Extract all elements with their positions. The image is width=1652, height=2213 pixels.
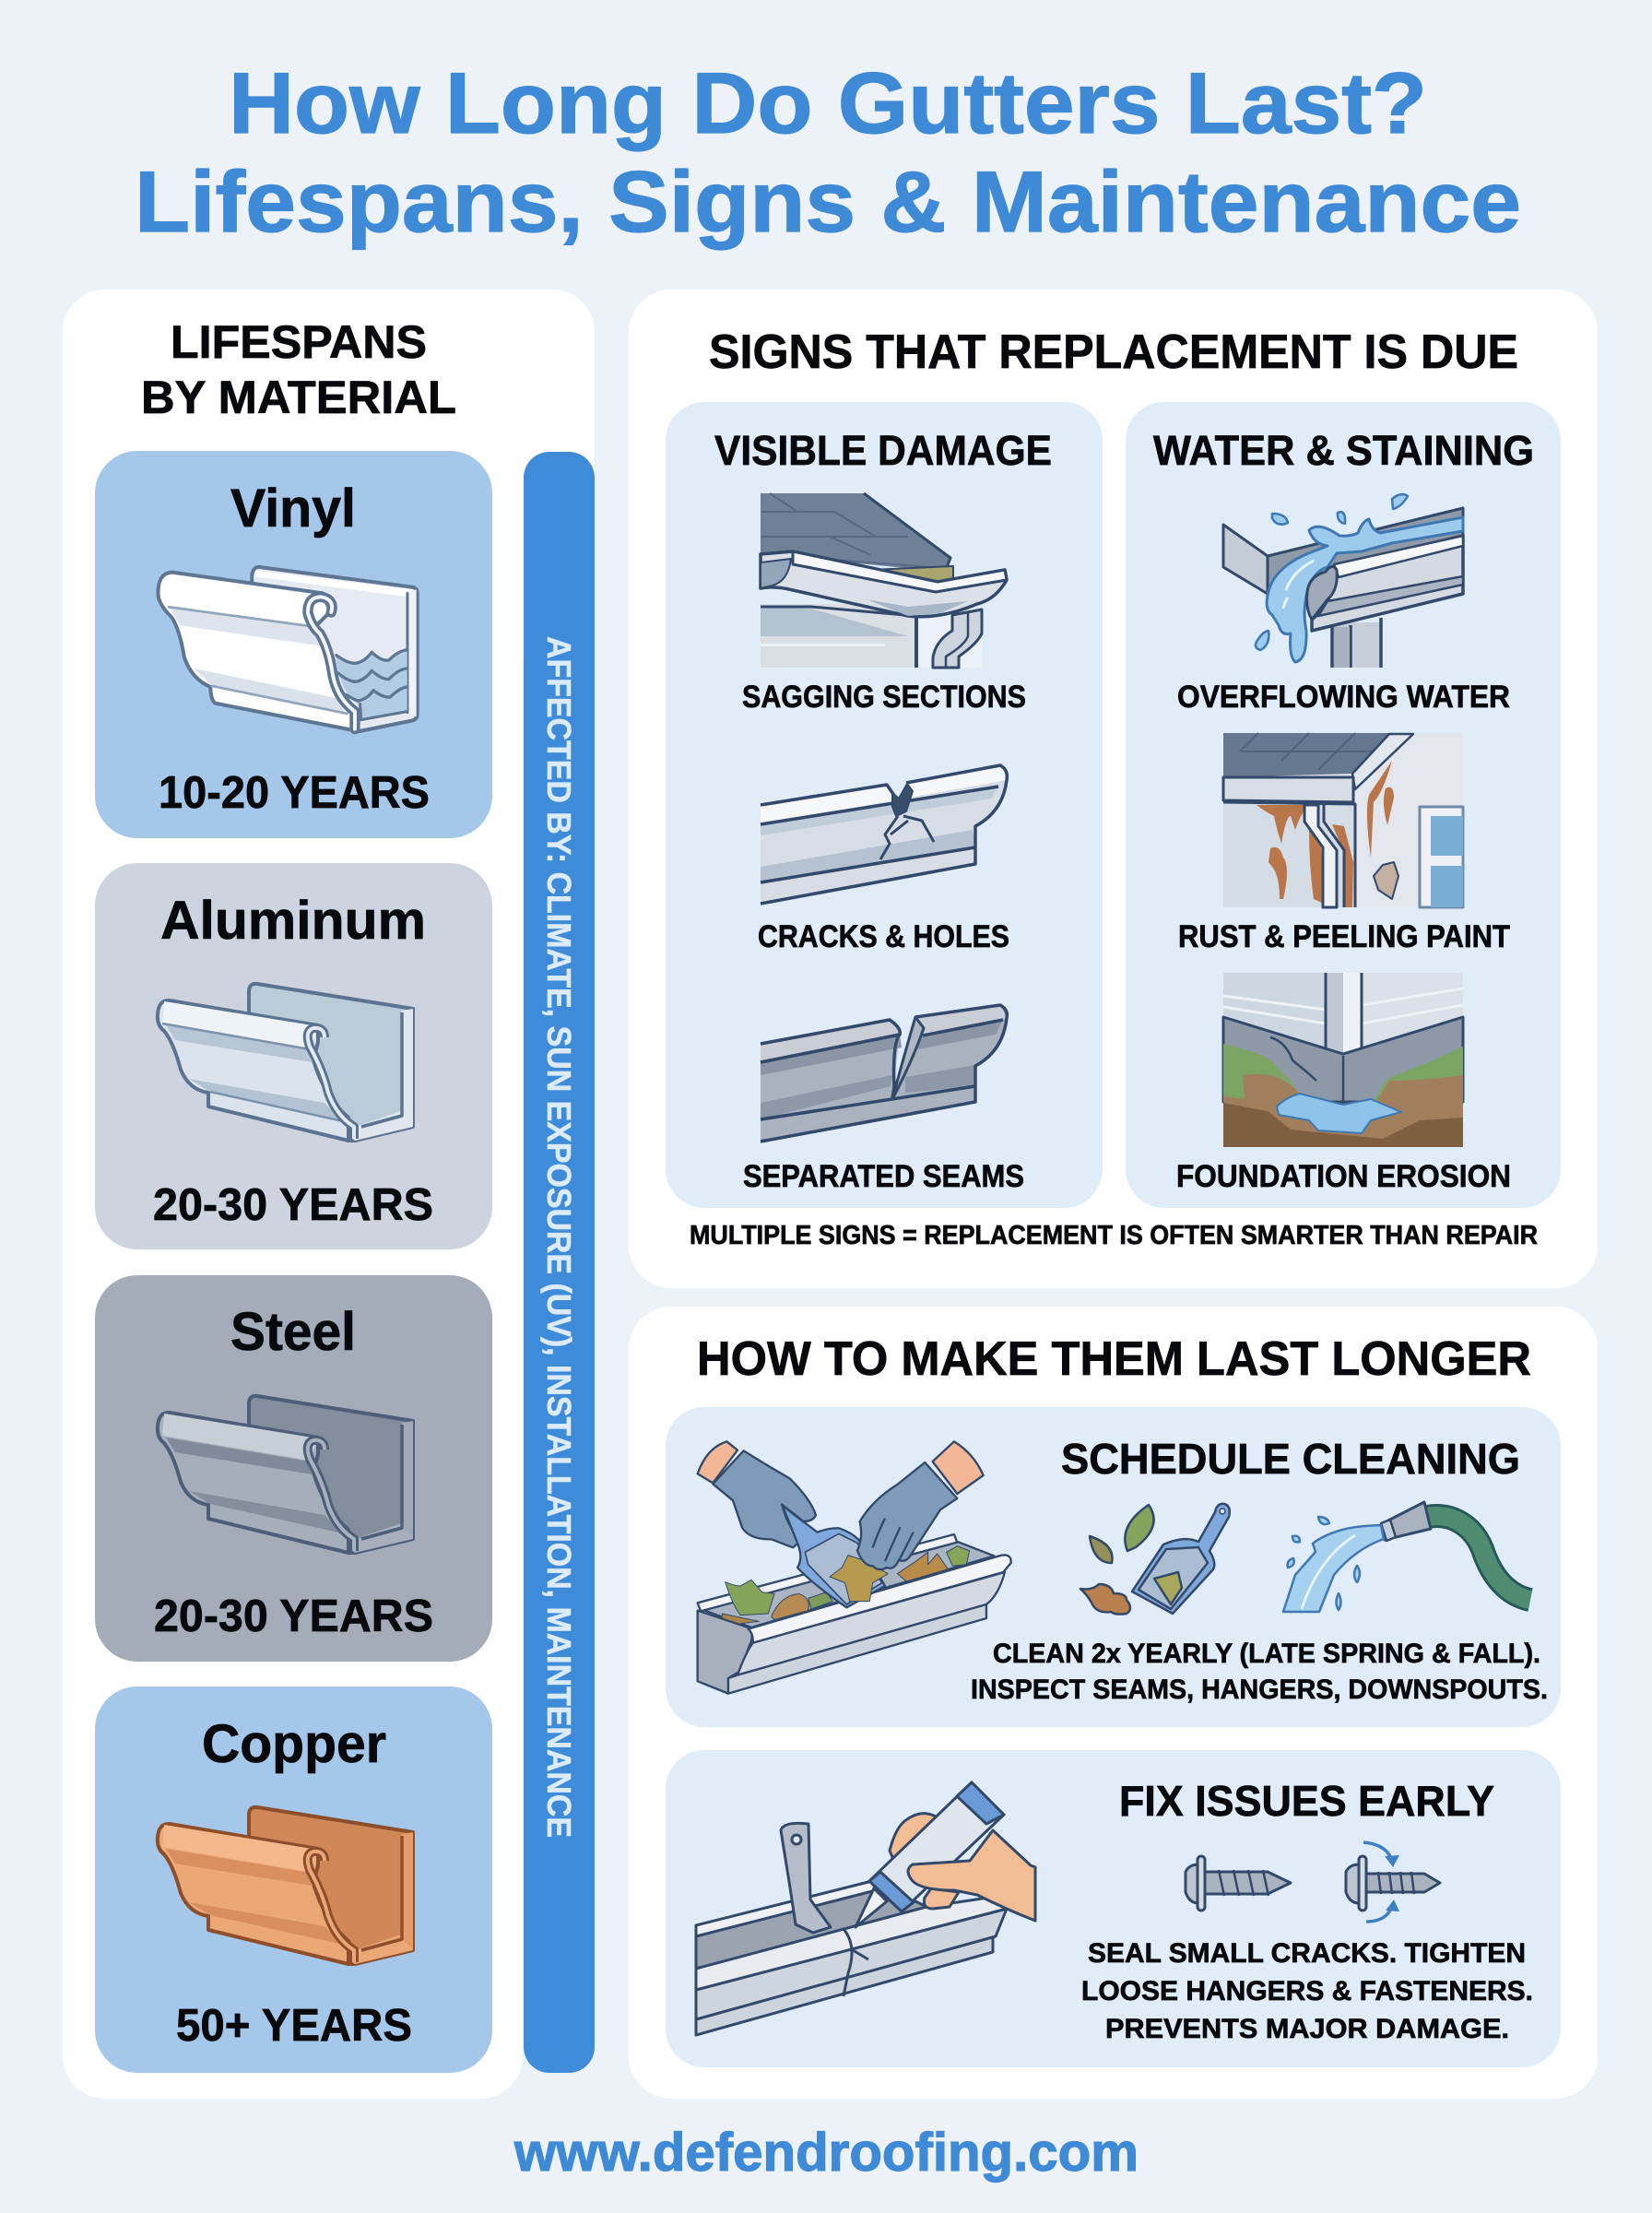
footer: website: www.defendroofing.com [513, 2123, 1139, 2183]
subpanel: fix issues early: LOOSE HANGERS & FASTENERS. [1081, 1976, 1533, 2006]
card: steel [95, 1275, 492, 1662]
illustration: sagging sections [761, 493, 1007, 668]
heading: lifespans by material: BY MATERIAL [141, 372, 456, 423]
card: copper: 50+ YEARS [176, 2001, 412, 2051]
subpanel: fix issues early [666, 1750, 1561, 2067]
illustration: separated seams [761, 1005, 1007, 1142]
subpanel: schedule cleaning: CLEAN 2x YEARLY (LATE SPRING & FALL). [993, 1639, 1540, 1669]
icon: tightening screw with arrows [1346, 1842, 1440, 1922]
subpanel: fix issues early: SEAL SMALL CRACKS. TIGHTEN [1088, 1938, 1526, 1969]
icon: leaves and scoop [1080, 1504, 1230, 1615]
icon: copper gutter [158, 1807, 413, 1964]
illustration: cracks and holes [761, 765, 1008, 904]
subpanel: schedule cleaning: INSPECT SEAMS, HANGERS, DOWNSPOUTS. [971, 1675, 1548, 1705]
card: aluminum: 20-30 YEARS [153, 1180, 433, 1230]
card: aluminum: Aluminum [160, 891, 426, 951]
card: copper: Copper [202, 1714, 386, 1774]
panel: lifespans by material [63, 290, 595, 2099]
heading: lifespans by material: LIFESPANS [171, 316, 427, 368]
title: How Long Do Gutters Last? [229, 54, 1427, 151]
illustration: hands cleaning gutter [698, 1441, 1011, 1694]
illustration: caulking a gutter crack [696, 1782, 1035, 2035]
icon: aluminum gutter [158, 984, 413, 1141]
heading: last longer: HOW TO MAKE THEM LAST LONGER [697, 1332, 1531, 1386]
title: Lifespans, Signs & Maintenance [135, 153, 1521, 250]
heading: lifespans by material [141, 316, 456, 423]
subpanel: fix issues early: PREVENTS MAJOR DAMAGE. [1105, 2014, 1509, 2044]
subpanel: water and staining [1126, 402, 1561, 1208]
card: steel: Steel [230, 1302, 356, 1362]
heading: signs: SIGNS THAT REPLACEMENT IS DUE [709, 325, 1518, 379]
title [135, 54, 1521, 250]
subpanel: fix issues early: FIX ISSUES EARLY [1119, 1777, 1494, 1825]
vertical bar: affected by: AFFECTED BY: CLIMATE, SUN EXPOSURE (UV), INSTALLATION, MAINTENANCE [540, 636, 578, 1838]
subpanel: water and staining: FOUNDATION EROSION [1176, 1159, 1511, 1194]
vertical bar: affected by [524, 452, 595, 2073]
card: vinyl: 10-20 YEARS [159, 768, 430, 818]
card: copper [95, 1686, 492, 2073]
panel: how to make them last longer [629, 1307, 1598, 2099]
illustration: rust and peeling paint [1223, 733, 1463, 907]
panel: signs that replacement is due [629, 290, 1598, 1288]
subpanel: schedule cleaning [666, 1407, 1561, 1727]
subpanel: schedule cleaning: SCHEDULE CLEANING [1061, 1435, 1520, 1483]
icon: screw [1186, 1856, 1291, 1911]
subpanel: visible damage: CRACKS & HOLES [758, 919, 1009, 954]
icon: hose spraying water [1283, 1502, 1530, 1612]
card: aluminum [95, 863, 492, 1249]
illustration: foundation erosion [1223, 973, 1463, 1147]
subpanel: visible damage: VISIBLE DAMAGE [714, 427, 1052, 474]
card: steel: 20-30 YEARS [154, 1592, 433, 1641]
subpanel: water and staining: RUST & PEELING PAINT [1178, 919, 1510, 954]
card: vinyl [95, 451, 492, 838]
illustration: overflowing water [1223, 494, 1463, 668]
card: vinyl: Vinyl [230, 479, 356, 538]
subpanel: visible damage: SAGGING SECTIONS [742, 680, 1026, 715]
subpanel: water and staining: WATER & STAINING [1153, 427, 1534, 474]
subpanel: visible damage: SEPARATED SEAMS [743, 1159, 1024, 1194]
subpanel: visible damage [666, 402, 1103, 1208]
note: multiple signs: MULTIPLE SIGNS = REPLACEMENT IS OFTEN SMARTER THAN REPAIR [690, 1221, 1538, 1250]
subpanel: water and staining: OVERFLOWING WATER [1177, 680, 1510, 715]
icon: steel gutter [158, 1396, 413, 1553]
icon: vinyl gutter with water [159, 567, 418, 732]
